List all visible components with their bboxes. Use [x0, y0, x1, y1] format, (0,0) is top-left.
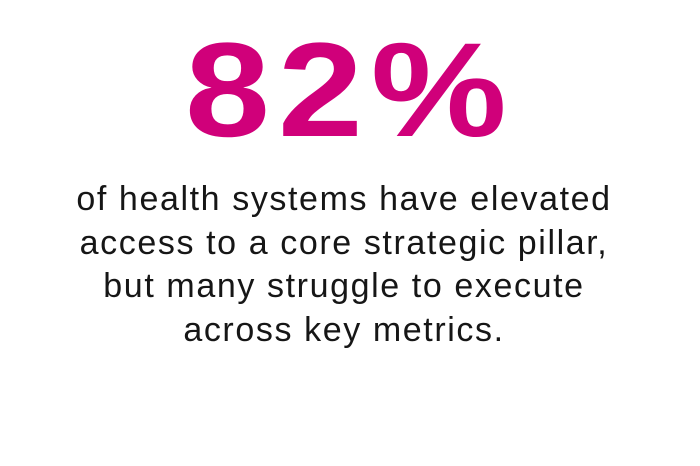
description text: [76, 180, 612, 348]
headline stat: 82%: [185, 16, 515, 165]
description text: access to a core strategic pillar,: [80, 224, 608, 262]
description text: across key metrics.: [183, 310, 505, 348]
description text: of health systems have elevated: [76, 180, 612, 218]
description text: but many struggle to execute: [103, 267, 585, 305]
